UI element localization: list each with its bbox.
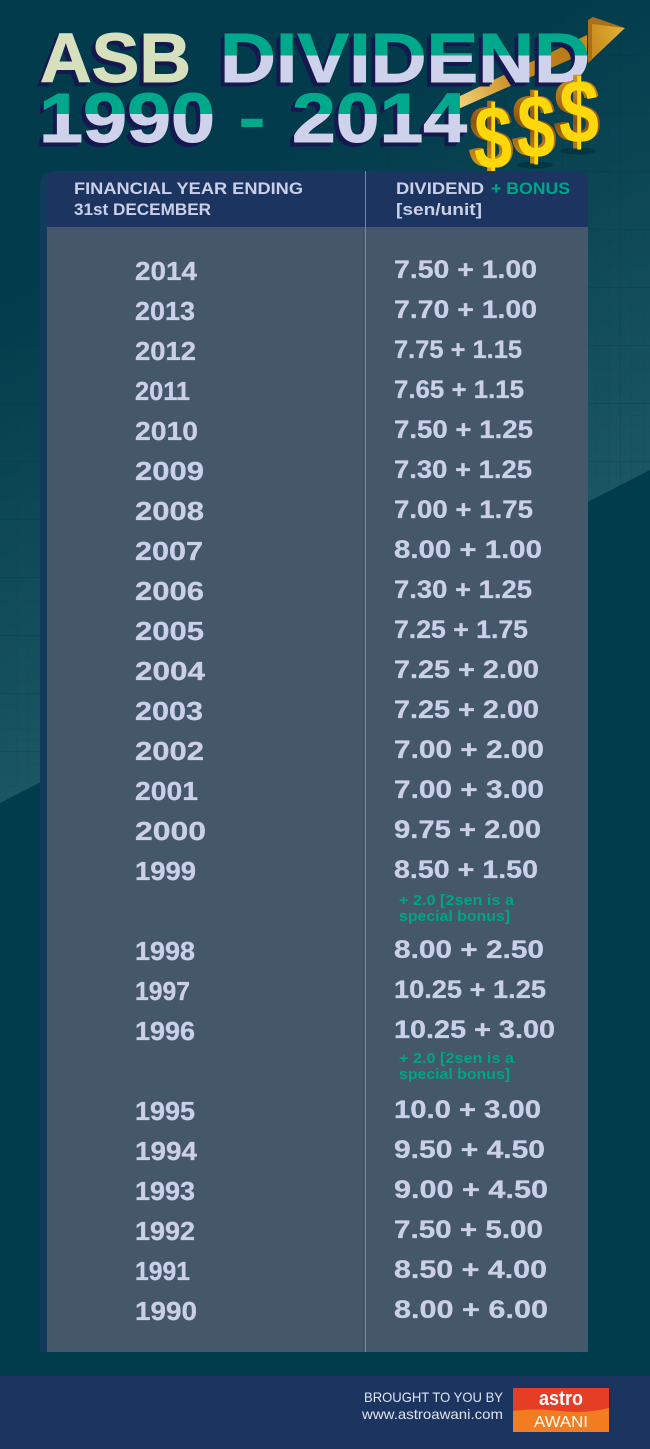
icon: gold dollar signs <box>468 62 601 189</box>
row 2002: 2002 <box>135 738 204 766</box>
title line: 1990 - 2014: 2014 <box>292 79 467 157</box>
row 1990: 8.00 + 6.00 <box>394 1296 548 1324</box>
title line: ASB DIVIDEND: ASB <box>36 23 187 101</box>
row 2005 <box>135 616 528 646</box>
row 1992: 7.50 + 5.00 <box>394 1216 543 1244</box>
table header: 31st DECEMBER <box>74 200 211 219</box>
row 1991 <box>135 1256 547 1286</box>
row 2008 <box>135 496 533 526</box>
row 2013 <box>135 296 537 326</box>
row 1994 <box>135 1136 545 1166</box>
note: 1999 special bonus: special bonus] <box>399 909 510 925</box>
icon: gold dollar signs: $ <box>559 63 599 163</box>
title line: 1990 - 2014: - <box>238 78 266 156</box>
row 1995: 1995 <box>135 1098 195 1126</box>
icon: gold dollar signs: $ <box>513 77 555 177</box>
title line: 1990 - 2014: 1990 <box>39 79 215 157</box>
title line: 1990 - 2014 <box>35 78 467 161</box>
row 2005: 2005 <box>135 618 204 646</box>
icon: gold dollar signs: $ <box>472 88 514 188</box>
title line: ASB DIVIDEND: ASB <box>38 21 189 99</box>
row 1995: 10.0 + 3.00 <box>394 1096 541 1124</box>
row 2002: 7.00 + 2.00 <box>394 736 544 764</box>
row 2009 <box>135 456 532 486</box>
footer credit text: BROUGHT TO YOU BY <box>364 1389 504 1405</box>
panel: dividend table <box>40 171 588 1352</box>
row 1996: 1996 <box>135 1018 195 1046</box>
table header: + BONUS <box>491 179 570 198</box>
icon: gold dollar signs: $ <box>557 62 601 162</box>
row 2006 <box>135 576 532 606</box>
row 2011: 7.65 + 1.15 <box>394 376 524 404</box>
icon: gold dollar signs: $ <box>555 62 599 162</box>
row 1991: 8.50 + 4.00 <box>394 1256 547 1284</box>
note: 1996 special bonus: + 2.0 [2sen is a <box>399 1051 515 1067</box>
icon: gold dollar signs: $ <box>468 88 510 188</box>
row 1994: 9.50 + 4.50 <box>394 1136 545 1164</box>
row 2010: 7.50 + 1.25 <box>394 416 533 444</box>
note: 1999 special bonus <box>399 893 515 925</box>
row 2003 <box>135 696 539 726</box>
logo: astro awani: astro <box>539 1388 583 1410</box>
row 2003: 7.25 + 2.00 <box>394 696 539 724</box>
row 1992: 1992 <box>135 1218 195 1246</box>
icon: gold dollar signs: $ <box>470 88 512 188</box>
row 1999: 1999 <box>135 858 196 886</box>
row 1997: 10.25 + 1.25 <box>394 976 546 1004</box>
row 2009: 2009 <box>135 458 204 486</box>
row 2001: 2001 <box>135 778 198 806</box>
icon: rising gold arrow <box>456 17 625 110</box>
row 1993 <box>135 1176 548 1206</box>
row 2008: 2008 <box>135 498 204 526</box>
table body <box>47 227 588 1352</box>
row 2012: 2012 <box>135 338 196 366</box>
title line: ASB DIVIDEND: DIVIDEND <box>220 19 590 97</box>
icon: gold dollar signs: $ <box>515 77 557 177</box>
row 1999 <box>135 856 538 886</box>
row 2001 <box>135 776 544 806</box>
row 2006: 7.30 + 1.25 <box>394 576 532 604</box>
title line: ASB DIVIDEND: DIVIDEND <box>216 23 586 101</box>
title line: 1990 - 2014: 2014 <box>290 81 465 159</box>
row 1998: 8.00 + 2.50 <box>394 936 544 964</box>
title line: ASB DIVIDEND: ASB <box>40 19 191 97</box>
row 2014: 7.50 + 1.00 <box>394 256 537 284</box>
title line: 1990 - 2014: 1990 <box>37 81 213 159</box>
row 2014 <box>135 256 537 286</box>
logo: astro awani <box>513 1388 609 1432</box>
table header: [sen/unit] <box>396 200 482 219</box>
panel side shadow <box>40 171 70 1352</box>
table header <box>47 171 588 227</box>
row 2006: 2006 <box>135 578 204 606</box>
row 2003: 2003 <box>135 698 203 726</box>
row 1996: 10.25 + 3.00 <box>394 1016 555 1044</box>
row 2010 <box>135 416 533 446</box>
row 2010: 2010 <box>135 418 198 446</box>
table header: FINANCIAL YEAR ENDING <box>74 179 303 198</box>
row 2013: 7.70 + 1.00 <box>394 296 537 324</box>
note: 1996 special bonus <box>399 1051 515 1083</box>
row 2000: 9.75 + 2.00 <box>394 816 541 844</box>
row 2007: 8.00 + 1.00 <box>394 536 542 564</box>
table header: DIVIDEND <box>396 179 484 198</box>
title line: ASB DIVIDEND: DIVIDEND <box>218 21 588 99</box>
row 2005: 7.25 + 1.75 <box>394 616 528 644</box>
title line: 1990 - 2014: 1990 <box>35 83 211 161</box>
footer credit text: www.astroawani.com <box>361 1406 503 1422</box>
row 2008: 7.00 + 1.75 <box>394 496 533 524</box>
title line: 1990 - 2014: 2014 <box>288 83 463 161</box>
row 1995 <box>135 1096 541 1126</box>
row 2011 <box>135 376 524 406</box>
row 1993: 9.00 + 4.50 <box>394 1176 548 1204</box>
row 1999: 8.50 + 1.50 <box>394 856 538 884</box>
row 1993: 1993 <box>135 1178 195 1206</box>
row 2007 <box>135 536 542 566</box>
row 1990: 1990 <box>135 1298 197 1326</box>
row 2014: 2014 <box>135 258 198 286</box>
row 1998 <box>135 936 544 966</box>
icon: gold dollar signs: $ <box>511 77 553 177</box>
row 2009: 7.30 + 1.25 <box>394 456 532 484</box>
footer bar <box>0 1376 650 1449</box>
row 2000 <box>135 816 541 846</box>
row 1997 <box>135 976 546 1006</box>
icon: gold dollar signs: $ <box>553 62 597 162</box>
row 2007: 2007 <box>135 538 203 566</box>
row 2004: 2004 <box>135 658 206 686</box>
row 2011: 2011 <box>135 378 190 406</box>
footer credit text <box>361 1389 504 1422</box>
row 1997: 1997 <box>135 978 190 1006</box>
row 2000: 2000 <box>135 818 206 846</box>
row 2002 <box>135 736 544 766</box>
row 1994: 1994 <box>135 1138 198 1166</box>
row 2012: 7.75 + 1.15 <box>394 336 522 364</box>
row 2004: 7.25 + 2.00 <box>394 656 539 684</box>
row 2013: 2013 <box>135 298 195 326</box>
row 1990 <box>135 1296 548 1326</box>
row 1992 <box>135 1216 543 1246</box>
row 2004 <box>135 656 539 686</box>
title <box>35 19 590 161</box>
row 1996 <box>135 1016 555 1046</box>
row 1998: 1998 <box>135 938 195 966</box>
title line: ASB DIVIDEND <box>36 19 590 101</box>
icon: gold dollar signs: $ <box>517 78 555 178</box>
logo: astro awani: AWANI <box>534 1414 588 1431</box>
row 2001: 7.00 + 3.00 <box>394 776 544 804</box>
row 1991: 1991 <box>135 1258 190 1286</box>
note: 1996 special bonus: special bonus] <box>399 1067 510 1083</box>
icon: gold dollar signs: $ <box>474 89 512 189</box>
note: 1999 special bonus: + 2.0 [2sen is a <box>399 893 515 909</box>
row 2012 <box>135 336 522 366</box>
